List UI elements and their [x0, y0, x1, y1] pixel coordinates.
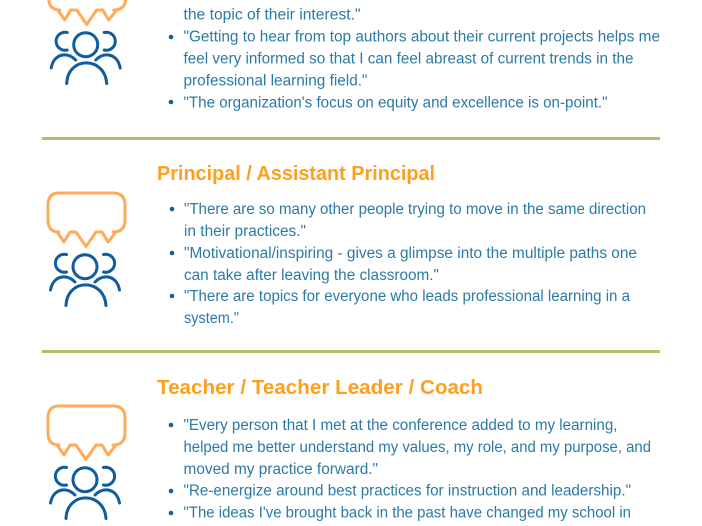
quote list: helped me better understand my values, my role, and my purpose, and: [184, 439, 651, 456]
quote list: can take after leaving the classroom.": [184, 267, 439, 284]
quote list: "Getting to hear from top authors about their current projects helps me: [184, 28, 660, 45]
panel: Principal / Assistant Principal: [48, 163, 646, 327]
quote list: [169, 6, 660, 111]
heading: Principal / Assistant Principal: [157, 163, 435, 185]
quote list: "Motivational/inspiring - gives a glimpse into the multiple paths one: [184, 245, 637, 262]
icon: speech bubble over people: [48, 193, 125, 306]
panel: Teacher / Teacher Leader / Coach: [48, 377, 651, 522]
heading: Teacher / Teacher Leader / Coach: [157, 377, 483, 399]
quote list: system.": [184, 310, 239, 327]
quote list: [170, 201, 646, 327]
quote list: professional learning field.": [184, 72, 368, 89]
quote list: the topic of their interest.": [184, 6, 360, 24]
quote list: "Every person that I met at the conference added to my learning,: [184, 417, 618, 434]
quote list: "The ideas I've brought back in the past have changed my school in: [184, 504, 631, 522]
quote list: feel very informed so that I can feel abreast of current trends in the: [184, 50, 634, 67]
icon: speech bubble over people: [48, 406, 125, 518]
quote list: "Re-energize around best practices for instruction and leadership.": [184, 482, 631, 500]
panel: first role (cropped): [49, 0, 660, 111]
quote list: "The organization's focus on equity and excellence is on-point.": [184, 94, 608, 111]
quote list: "There are so many other people trying to move in the same direction: [184, 201, 646, 218]
icon: speech bubble over people: [49, 0, 126, 84]
quote list: [169, 417, 651, 522]
quote list: in their practices.": [184, 223, 306, 240]
quote list: moved my practice forward.": [184, 461, 378, 478]
quote list: "There are topics for everyone who leads professional learning in a: [184, 288, 630, 305]
